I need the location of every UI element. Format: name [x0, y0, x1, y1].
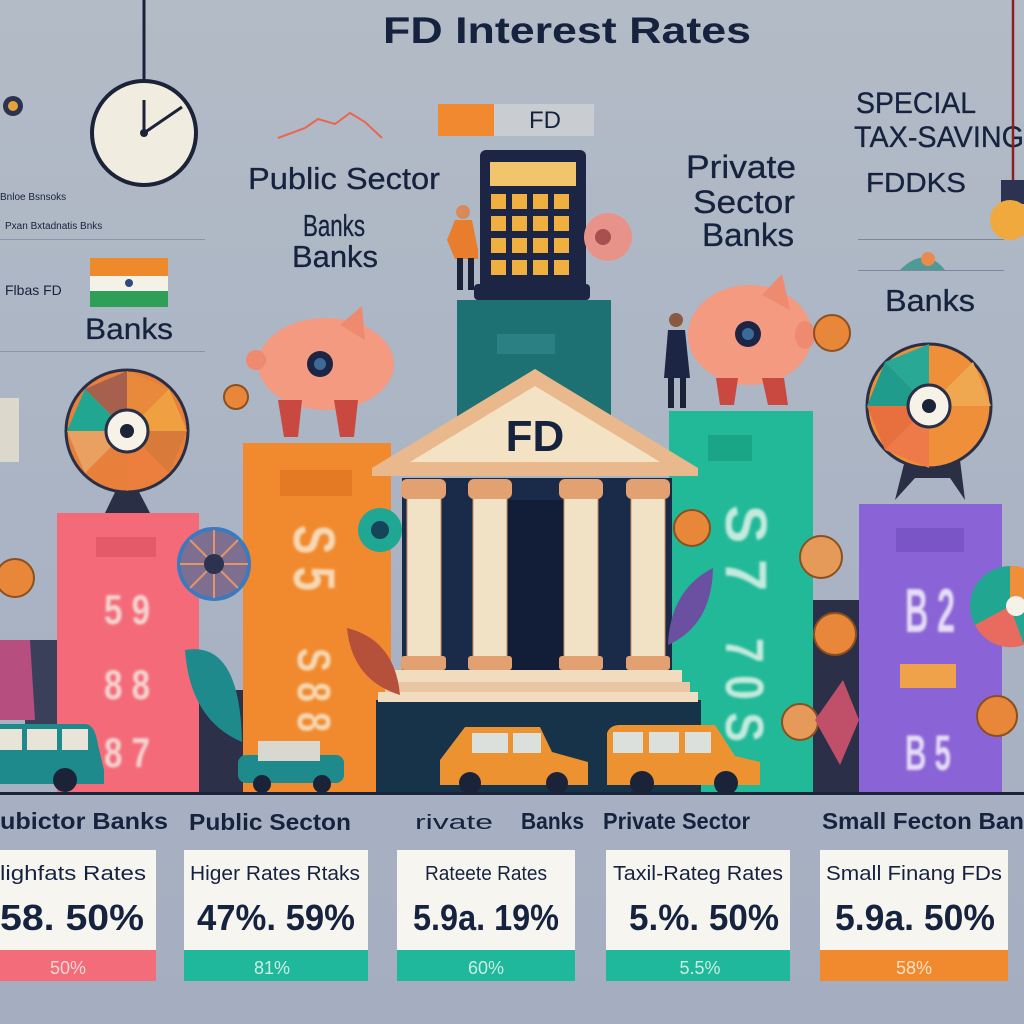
column labels: Small Fecton Ban — [822, 808, 1024, 834]
left-edge note card — [0, 398, 19, 462]
bar: green — [669, 411, 813, 793]
FD sign: FD — [506, 412, 564, 461]
card 4: 5.5% — [679, 958, 721, 978]
card 1: lighfats Rates — [0, 863, 146, 885]
pink fan — [584, 213, 632, 261]
ground line — [0, 792, 1024, 795]
icon: ashoka wheel — [179, 529, 249, 599]
small bulb left — [3, 96, 23, 116]
right partial pie — [970, 566, 1024, 647]
card 4: Taxil-Rateg Rates — [613, 863, 783, 885]
heading: special tax-saving — [854, 87, 1024, 198]
right Banks label: Banks — [885, 283, 975, 318]
card 1: 58. 50% — [0, 897, 144, 938]
card 2: 47%. 59% — [197, 897, 355, 938]
card 1 — [0, 850, 156, 981]
right divider note — [858, 239, 1004, 271]
left Banks label: Banks — [85, 313, 173, 346]
heading: public sector banks: Banks — [303, 208, 365, 243]
icon: piggy bank right — [688, 274, 815, 405]
card 2 — [184, 850, 368, 981]
column labels: rivate — [415, 812, 493, 834]
icon: right pie wheel — [867, 344, 991, 500]
heading: private sector banks: Private — [686, 149, 796, 185]
heading: special tax-saving: SPECIAL — [856, 87, 976, 120]
column labels: ubictor Banks — [0, 808, 168, 834]
building base — [376, 700, 701, 793]
heading: private sector banks: Banks — [702, 217, 794, 253]
card 4: 5.%. 50% — [629, 897, 779, 938]
bar: pink: 8 7 — [104, 729, 150, 776]
title: FD Interest Rates — [383, 10, 751, 51]
left notes: Flbas FD — [5, 282, 62, 298]
card 5 — [820, 850, 1008, 981]
icon: hanging bulb — [990, 0, 1024, 240]
bar: orange: S 5 — [281, 525, 346, 591]
bar: green: 7 0 S — [714, 638, 774, 742]
left notes: Pxan Bxtadnatis Bnks — [5, 221, 102, 232]
heading: special tax-saving: FDDKS — [866, 167, 966, 198]
icon: wall clock — [92, 0, 196, 185]
column labels — [0, 808, 1024, 835]
left notes: Bnloe Bsnsoks — [0, 192, 66, 203]
icon: calculator — [474, 150, 590, 300]
icon: piggy bank left — [246, 306, 394, 437]
bar: pink — [57, 513, 199, 793]
trend line — [278, 113, 382, 138]
column labels: Public Secton — [189, 809, 351, 835]
bar: orange: S 8 8 — [288, 648, 340, 732]
leaves — [0, 568, 859, 765]
bar: green: S 7 — [713, 505, 778, 591]
card 1: 50% — [50, 958, 86, 978]
teal coin — [358, 508, 402, 552]
heading: public sector banks: Public Sector — [248, 161, 440, 196]
card 5: 5.9a. 50% — [835, 897, 995, 938]
card 2: 81% — [254, 958, 290, 978]
card 3 — [397, 850, 575, 981]
bar: pink: 8 8 — [104, 661, 150, 708]
coins — [0, 315, 1017, 740]
bar: pink: 5 9 — [104, 586, 150, 633]
FD tag — [438, 104, 594, 136]
column labels: Private Sector — [603, 808, 750, 834]
card 2: Higer Rates Rtaks — [190, 863, 360, 885]
bar: orange — [243, 443, 391, 793]
card 3: 60% — [468, 958, 504, 978]
person by piggy — [664, 313, 690, 408]
bar: purple: B 5 — [905, 725, 951, 781]
heading: public sector banks — [248, 161, 440, 274]
column labels: Banks — [521, 808, 584, 834]
card 5: 58% — [896, 958, 932, 978]
heading: private sector banks — [686, 149, 796, 253]
cars — [0, 724, 760, 795]
card 3: Rateete Rates — [425, 863, 547, 885]
icon: left pie wheel — [66, 370, 188, 513]
heading: public sector banks: Banks — [292, 239, 378, 274]
icon: india flag — [90, 258, 168, 307]
bank building — [372, 369, 698, 702]
teal pedestal — [457, 300, 611, 420]
card 4 — [606, 850, 790, 981]
card 5: Small Finang FDs — [826, 863, 1002, 885]
person left of calculator — [447, 205, 478, 290]
heading: private sector banks: Sector — [693, 184, 795, 220]
bar: purple — [859, 504, 1002, 793]
FD tag: FD — [529, 107, 561, 134]
dark backdrop blocks — [25, 600, 859, 793]
bar: purple: B 2 — [905, 577, 955, 646]
left notes — [0, 192, 205, 352]
card 3: 5.9a. 19% — [413, 897, 559, 938]
